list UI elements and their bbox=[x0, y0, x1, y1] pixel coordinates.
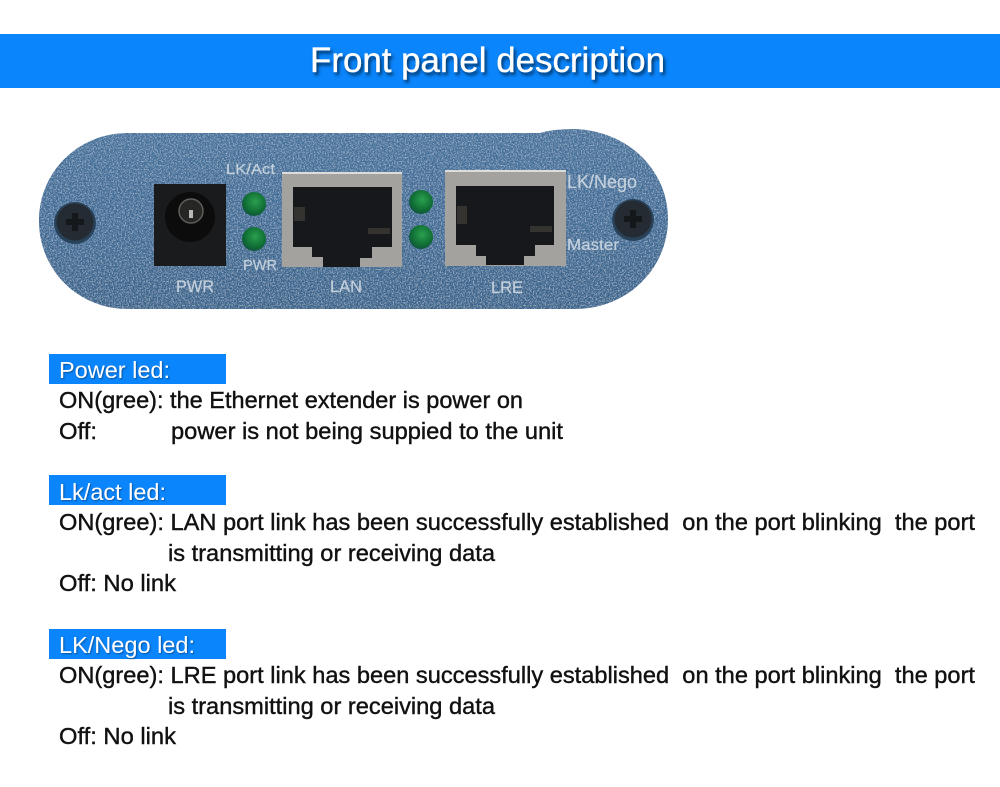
text: lk/act led off: Off: No link bbox=[59, 570, 177, 596]
icon: LED right upper bbox=[409, 190, 433, 214]
section: LK/Nego led bbox=[49, 629, 976, 749]
text: lk/nego led on: ON(gree): LRE port link has been successfully established on the port blinking the port bbox=[59, 662, 976, 688]
heading: Lk/act led bbox=[49, 475, 226, 505]
label: LAN: LAN bbox=[330, 277, 362, 296]
heading: LK/Nego led: LK/Nego led: bbox=[59, 632, 195, 658]
device faceplate bbox=[39, 129, 668, 309]
icon: right screw bbox=[612, 199, 654, 241]
icon: LED right lower bbox=[409, 225, 433, 249]
icon: LED LK/Act left bbox=[242, 192, 266, 216]
text: lk/act led on bbox=[59, 509, 976, 566]
heading: Power led bbox=[49, 354, 226, 384]
label: LK/Nego: LK/Nego bbox=[567, 172, 637, 192]
heading: Lk/act led: Lk/act led: bbox=[59, 479, 166, 505]
panel: device front panel photo bbox=[39, 129, 668, 309]
section: Lk/act led bbox=[49, 475, 976, 596]
text: power led on: ON(gree): the Ethernet extender is power on bbox=[59, 387, 523, 413]
label: Master: Master bbox=[567, 237, 620, 254]
label: LRE: LRE bbox=[491, 278, 523, 297]
label: LK/Act: LK/Act bbox=[226, 161, 276, 178]
icon: LAN port bbox=[282, 172, 402, 267]
text: lk/nego led on: is transmitting or receiving data bbox=[168, 693, 495, 719]
icon: left screw bbox=[54, 202, 96, 244]
text: lk/act led on: is transmitting or receiving data bbox=[168, 540, 495, 566]
title banner bbox=[0, 34, 1000, 88]
title: Front panel description bbox=[310, 41, 665, 80]
heading: Power led: Power led: bbox=[59, 357, 170, 383]
text: lk/nego led on bbox=[59, 662, 976, 719]
text: lk/nego led off: Off: No link bbox=[59, 723, 177, 749]
text: power led off: Off: bbox=[59, 418, 97, 444]
icon: LED PWR bbox=[242, 227, 266, 251]
text: power led off: power is not being suppied to the unit bbox=[171, 418, 564, 444]
icon: power jack bbox=[154, 184, 226, 266]
section: Power led bbox=[49, 354, 564, 444]
text: lk/act led on: ON(gree): LAN port link has been successfully established on the port blinking the port bbox=[59, 509, 976, 535]
heading: LK/Nego led bbox=[49, 629, 226, 659]
icon: LRE port bbox=[445, 170, 566, 266]
label: LED PWR: PWR bbox=[243, 257, 277, 274]
label: jack PWR: PWR bbox=[176, 277, 214, 296]
